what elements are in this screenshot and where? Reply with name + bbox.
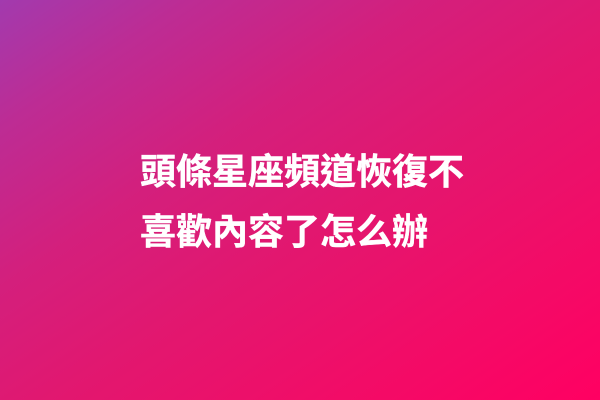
title: 喜歡內容了怎么辦 <box>140 211 428 252</box>
title: 頭條星座頻道恢復不 <box>140 151 464 192</box>
title <box>140 151 464 252</box>
